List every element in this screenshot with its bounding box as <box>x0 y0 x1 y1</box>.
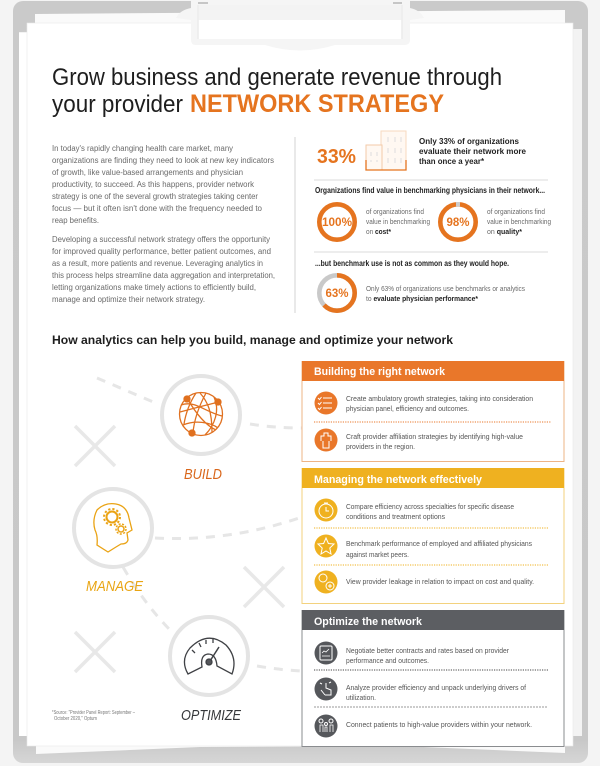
text: contracts <box>346 646 509 665</box>
text: affiliation: Craft provider affiliation strategies by identifying high-value <box>346 432 523 441</box>
text: utilization <box>346 683 527 702</box>
title: NETWORK STRATEGY <box>190 90 444 118</box>
title: your provider <box>52 91 183 118</box>
text: cost <box>366 207 430 236</box>
text: cost: on cost* <box>366 227 391 236</box>
manage step <box>74 489 152 595</box>
header: building: Building the right network <box>314 366 446 378</box>
stat: 33 percent: evaluate their network more <box>419 147 527 156</box>
text: quality: of organizations find <box>487 207 545 216</box>
title <box>52 64 502 118</box>
source footnote: October 2020," Optum <box>54 716 97 722</box>
icon: head with gears <box>94 504 132 552</box>
intro text: reap benefits. <box>52 216 99 225</box>
icon: leakage <box>314 570 338 594</box>
text: contracts: performance and outcomes. <box>346 656 429 665</box>
text: performance <box>366 284 525 303</box>
intro text: Developing a successful network strategy offers the opportunity <box>52 235 270 244</box>
icon: buildings <box>366 131 406 170</box>
intro text: focus — but it often isn't done with the frequency needed to <box>52 204 263 213</box>
stat: 33 percent: 33% <box>317 146 356 168</box>
benchmarking heading: Organizations find value in benchmarking physicians in their network... <box>315 186 545 195</box>
optimize step <box>170 617 248 724</box>
text: affiliation <box>346 432 523 451</box>
donut: 100 percent cost: 100% <box>322 217 352 229</box>
intro text: strategy is one of the several growth strategies taking center <box>52 192 258 201</box>
donut: 98 percent quality <box>440 204 476 240</box>
decorative crosses <box>75 426 284 672</box>
icon: hand touch <box>314 678 338 700</box>
icon: contract <box>314 642 338 664</box>
label: OPTIMIZE: OPTIMIZE <box>181 707 242 724</box>
text: connect: Connect patients to high-value providers within your network. <box>346 720 532 729</box>
intro text: In today's rapidly changing health care market, many <box>52 144 233 153</box>
text: affiliation: providers in the region. <box>346 442 415 451</box>
intro text: of growth, like value-based arrangements and physician <box>52 168 243 177</box>
text: utilization: Analyze provider efficiency and unpack underlying drivers of <box>346 683 527 692</box>
text: quality: value in benchmarking <box>487 217 551 226</box>
text: quality: on quality* <box>487 227 522 236</box>
icon: gauge <box>184 638 234 674</box>
panel: optimize the network <box>302 610 564 746</box>
text: performance: to evaluate physician performance* <box>366 294 478 303</box>
header: managing <box>302 468 564 488</box>
stat: 33 percent: than once a year* <box>419 157 485 166</box>
intro text: letting organizations make timely actions to efficiently build, <box>52 283 256 292</box>
header: optimize <box>302 610 564 630</box>
label: BUILD: BUILD <box>184 466 222 483</box>
title: Grow business and generate revenue through <box>52 64 502 91</box>
intro text: this process helps streamline data aggregation and interpretation, <box>52 271 275 280</box>
icon: checklist <box>314 392 338 414</box>
stat: 33 percent: Only 33% of organizations <box>419 137 520 146</box>
text: utilization: utilization. <box>346 693 376 702</box>
text: ambulatory <box>346 394 533 413</box>
text: leakage: View provider leakage in relation to impact on cost and quality. <box>346 577 534 586</box>
donut: 63 percent <box>319 275 355 311</box>
text: ambulatory: physician panel, efficiency and outcomes. <box>346 404 469 413</box>
icon: stopwatch <box>314 498 338 522</box>
donut: 63 percent: 63% <box>325 288 349 300</box>
panel: building the right network <box>302 361 564 462</box>
icon: provider affiliation <box>314 428 338 452</box>
intro text: manage and optimize their network strategy. <box>52 295 205 304</box>
header: building <box>302 361 564 381</box>
label: MANAGE: MANAGE <box>86 578 144 595</box>
build step <box>162 376 240 483</box>
panel: managing the network <box>302 468 564 604</box>
text: efficiency: conditions and treatment options <box>346 512 445 521</box>
text: benchmark: against market peers. <box>346 550 409 559</box>
text: quality <box>487 207 551 236</box>
text: performance: Only 63% of organizations use benchmarks or analytics <box>366 284 525 293</box>
icon: people <box>314 714 338 738</box>
text: cost: value in benchmarking <box>366 217 430 226</box>
text: benchmark: Benchmark performance of employed and affiliated physicians <box>346 539 532 548</box>
stat: 33 percent <box>317 131 527 170</box>
text: ambulatory: Create ambulatory growth strategies, taking into consideration <box>346 394 533 403</box>
text: efficiency <box>346 502 514 521</box>
source footnote <box>52 710 135 722</box>
text: efficiency: Compare efficiency across specialties for specific disease <box>346 502 514 511</box>
clipboard clip <box>176 0 424 50</box>
text: contracts: Negotiate better contracts and rates based on provider <box>346 646 509 655</box>
text: benchmark <box>346 539 532 559</box>
header: managing: Managing the network effectively <box>314 474 483 486</box>
intro text: for improved quality performance, better patient outcomes, and <box>52 247 271 256</box>
benchmark use heading: ...but benchmark use is not as common as they would hope. <box>315 259 509 268</box>
intro text: as a result, more patients and revenue. Leveraging analytics in <box>52 259 263 268</box>
text: cost: of organizations find <box>366 207 424 216</box>
icon: globe <box>180 392 222 436</box>
header: optimize: Optimize the network <box>314 616 423 628</box>
donut: 100 percent cost <box>319 204 355 240</box>
intro text <box>52 144 275 304</box>
intro text: productivity, to succeed. As this happens, provider network <box>52 180 255 189</box>
source footnote: *Source: "Provider Panel Report: September – <box>52 710 135 716</box>
donut: 98 percent quality: 98% <box>446 217 470 229</box>
section heading: How analytics can help you build, manage and optimize your network <box>52 333 453 347</box>
intro text: organizations are finding they need to look at new key indicators <box>52 156 274 165</box>
icon: star <box>314 534 338 558</box>
connecting dashed path <box>97 378 302 671</box>
